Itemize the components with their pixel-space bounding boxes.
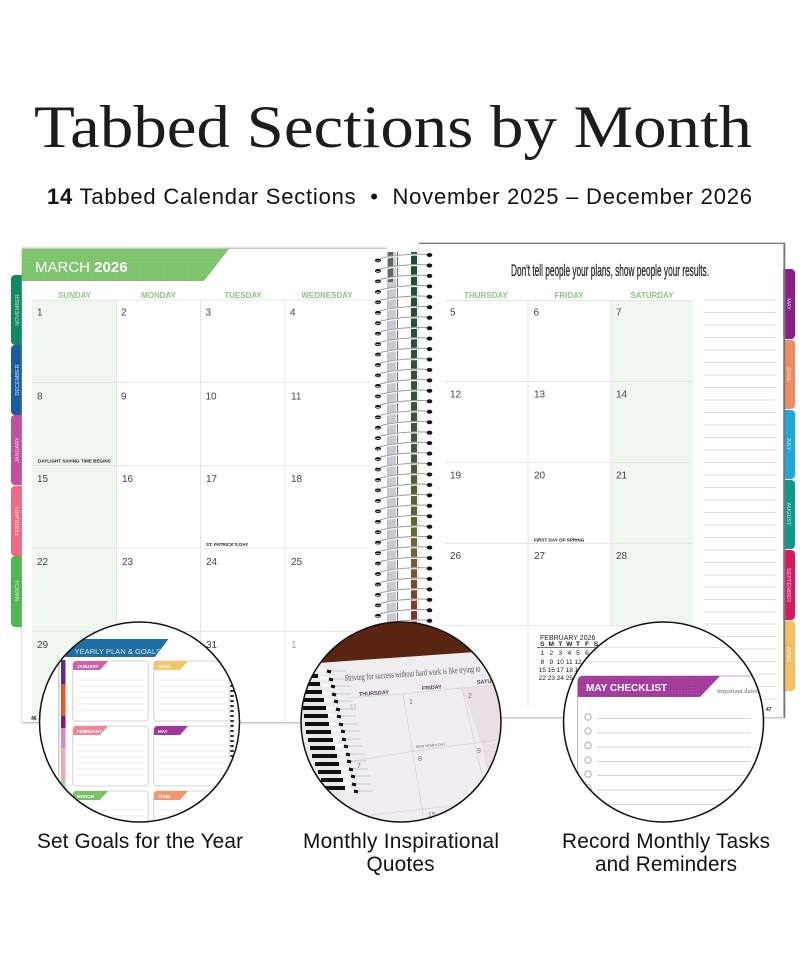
yearly plan banner bbox=[65, 639, 168, 657]
april box: APRIL bbox=[158, 664, 172, 669]
weekday headings bbox=[58, 291, 353, 300]
date numbers: 47 bbox=[766, 707, 772, 713]
date numbers: 19 bbox=[450, 470, 462, 482]
weekday labels in photo: THURSDAY bbox=[359, 690, 389, 698]
mini calendar: 10 bbox=[557, 659, 564, 666]
mini calendar: 20 bbox=[583, 667, 591, 674]
mini calendar: 19 bbox=[574, 667, 582, 674]
caption: set goals: Set Goals for the Year bbox=[37, 830, 243, 853]
left calendar page bbox=[22, 248, 387, 723]
weekday headings bbox=[464, 291, 674, 300]
date numbers: 1 bbox=[37, 308, 43, 318]
mini calendar: M bbox=[549, 641, 555, 648]
date numbers: 18 bbox=[291, 474, 303, 485]
weekday labels in photo: SATURDAY bbox=[477, 678, 507, 686]
date numbers: 7 bbox=[616, 308, 622, 318]
may box bbox=[154, 726, 229, 786]
april box bbox=[154, 661, 229, 721]
tab strip bbox=[61, 660, 66, 792]
date numbers bbox=[31, 308, 303, 722]
february box bbox=[73, 726, 148, 786]
dates in photo: 9 bbox=[477, 748, 481, 755]
mini calendar: 5 bbox=[576, 650, 580, 657]
dates in photo: 1 bbox=[409, 699, 413, 706]
caption: tasks and reminders bbox=[562, 830, 770, 876]
june box bbox=[153, 790, 211, 820]
callout circle: may checklist bbox=[564, 622, 774, 830]
quote text in photo: Striving for success without hard work is like trying to bbox=[344, 664, 481, 683]
event notes: ST. PATRICK'S DAY bbox=[206, 542, 248, 547]
checklist banner bbox=[578, 676, 720, 697]
saturday column shading bbox=[611, 300, 693, 625]
spiral coils bbox=[375, 253, 432, 628]
march box bbox=[72, 790, 149, 821]
spiral coils in photo bbox=[318, 670, 373, 792]
mini calendar: 4 bbox=[567, 650, 571, 657]
date numbers: 26 bbox=[450, 551, 462, 562]
weekday headings: SUNDAY bbox=[58, 291, 92, 300]
caption: tasks and reminders: Record Monthly Tasks bbox=[562, 830, 770, 853]
date numbers: 25 bbox=[291, 557, 303, 568]
weekday headings: MONDAY bbox=[141, 291, 177, 300]
event note: FIRST DAY OF SPRING bbox=[534, 538, 585, 542]
date numbers: 22 bbox=[37, 557, 49, 568]
date numbers: 5 bbox=[450, 308, 456, 318]
date numbers: 6 bbox=[534, 308, 540, 318]
checklist rows bbox=[585, 714, 751, 804]
callout circle: monthly quote photo bbox=[298, 622, 507, 830]
event notes bbox=[38, 458, 248, 547]
yearly plan banner: YEARLY PLAN & GOALS bbox=[74, 647, 161, 656]
right month tabs: APRIL bbox=[785, 647, 791, 663]
mini calendar: 23 bbox=[548, 675, 555, 682]
date numbers: 12 bbox=[450, 390, 462, 400]
holiday note in photo: NEW YEAR'S DAY bbox=[416, 742, 446, 749]
mini calendar: FEBRUARY 2026 bbox=[540, 635, 595, 642]
sunday column shading bbox=[32, 300, 116, 721]
dates in photo bbox=[349, 693, 481, 819]
checklist banner: MAY CHECKLIST bbox=[586, 683, 667, 694]
month header banner bbox=[22, 249, 229, 281]
event notes: DAYLIGHT SAVING TIME BEGINS bbox=[38, 458, 111, 464]
mini calendar: 18 bbox=[566, 667, 573, 674]
date numbers: 13 bbox=[534, 390, 546, 400]
dates in photo: 2 bbox=[468, 693, 472, 700]
right month tabs: JUNE bbox=[785, 367, 791, 382]
mini calendar bbox=[537, 635, 600, 682]
caption: monthly quotes bbox=[303, 830, 499, 876]
mini calendar: T bbox=[558, 641, 562, 648]
subtitle: 14 Tabbed Calendar Sections • November 2025 – December 2026 bbox=[47, 184, 752, 209]
mini calendar: 13 bbox=[583, 659, 591, 666]
mini calendar: T bbox=[576, 641, 580, 648]
january box: JANUARY bbox=[77, 664, 99, 669]
date numbers: 2 bbox=[121, 308, 127, 318]
mini calendar: 1 bbox=[540, 650, 544, 657]
date numbers: 23 bbox=[122, 557, 134, 568]
caption: monthly quotes: Monthly Inspirational bbox=[303, 830, 499, 853]
march box: MARCH bbox=[77, 794, 94, 799]
caption: tasks and reminders: and Reminders bbox=[595, 853, 737, 876]
mini calendar: S bbox=[594, 641, 599, 648]
may box: MAY bbox=[158, 729, 168, 734]
mini calendar: 25 bbox=[566, 675, 573, 682]
mini calendar: F bbox=[585, 641, 589, 648]
date numbers: 20 bbox=[534, 470, 546, 482]
date numbers: 8 bbox=[37, 392, 43, 402]
january box bbox=[73, 661, 148, 721]
mini calendar: 28 bbox=[592, 675, 600, 682]
month header banner: MARCH 2026 bbox=[35, 259, 128, 276]
mini calendar: 2 bbox=[549, 650, 553, 657]
mini calendar: W bbox=[566, 641, 573, 648]
mini calendar: 12 bbox=[574, 659, 582, 666]
spiral spine bbox=[387, 250, 420, 625]
right month tabs: MAY bbox=[785, 298, 791, 310]
weekday headings: SATURDAY bbox=[630, 291, 674, 300]
date numbers: 17 bbox=[206, 474, 218, 485]
caption: monthly quotes: Quotes bbox=[366, 853, 434, 876]
date numbers: 3 bbox=[206, 308, 212, 318]
right month tabs: AUGUST bbox=[785, 503, 791, 526]
date numbers: 11 bbox=[291, 392, 302, 402]
february box: FEBRUARY bbox=[77, 729, 102, 734]
date numbers bbox=[450, 308, 772, 713]
date numbers: 27 bbox=[534, 551, 546, 562]
left month tabs bbox=[11, 275, 27, 627]
right month tabs bbox=[776, 269, 795, 691]
mini calendar: 26 bbox=[574, 675, 582, 682]
weekday headings: WEDNESDAY bbox=[301, 291, 353, 300]
left month tabs: MARCH bbox=[15, 581, 21, 601]
weekday headings: THURSDAY bbox=[464, 291, 509, 300]
dates in photo: 31 bbox=[349, 704, 357, 711]
date numbers: 1 bbox=[291, 640, 297, 651]
date numbers: 4 bbox=[290, 308, 296, 318]
left month tabs: JANUARY bbox=[15, 437, 21, 463]
mini calendar: 3 bbox=[558, 650, 562, 657]
notes lines bbox=[704, 300, 776, 699]
mini calendar: 24 bbox=[557, 675, 564, 682]
mini calendar: 6 bbox=[585, 650, 589, 657]
callout circle: yearly plan and goals bbox=[38, 621, 240, 823]
date numbers: 46 bbox=[31, 716, 37, 722]
date numbers: 28 bbox=[616, 551, 628, 562]
left month tabs: DECEMBER bbox=[15, 364, 21, 396]
date numbers: 31 bbox=[206, 640, 218, 651]
binder stack in photo bbox=[298, 668, 345, 812]
mini calendar: 17 bbox=[557, 667, 564, 674]
weekday headings: FRIDAY bbox=[554, 291, 584, 300]
left month tabs: FEBRUARY bbox=[15, 506, 21, 536]
dates in photo: 15 bbox=[428, 812, 436, 819]
checklist note: Important dates, tasks bbox=[717, 688, 774, 695]
mini calendar: 21 bbox=[592, 667, 600, 674]
mini calendar: 15 bbox=[539, 667, 546, 674]
title: Tabbed Sections by Month bbox=[34, 94, 752, 160]
date numbers: 24 bbox=[206, 557, 218, 568]
date numbers: 9 bbox=[121, 392, 127, 402]
right month tabs: JULY bbox=[785, 437, 791, 451]
mini calendar: 16 bbox=[548, 667, 555, 674]
right month tabs: SEPTEMBER bbox=[785, 568, 791, 602]
weekday headings: TUESDAY bbox=[224, 291, 262, 300]
date numbers: 21 bbox=[616, 470, 628, 482]
mini calendar: 7 bbox=[594, 650, 598, 657]
mini calendar: S bbox=[540, 641, 545, 648]
date numbers: 10 bbox=[206, 392, 217, 402]
mini calendar: 8 bbox=[540, 659, 544, 666]
right calendar page bbox=[419, 244, 784, 718]
weekday labels in photo: FRIDAY bbox=[422, 685, 442, 692]
date numbers: 15 bbox=[37, 474, 49, 485]
mini calendar: 14 bbox=[592, 659, 600, 666]
mini calendar: 22 bbox=[539, 675, 546, 682]
date numbers: 29 bbox=[37, 640, 49, 651]
mini calendar: 27 bbox=[583, 675, 591, 682]
june box: JUNE bbox=[158, 794, 170, 799]
weekday labels in photo bbox=[358, 679, 492, 696]
date numbers: 14 bbox=[616, 390, 628, 400]
left month tabs: NOVEMBER bbox=[15, 294, 21, 326]
date numbers: 16 bbox=[122, 474, 134, 485]
mini calendar: 11 bbox=[566, 659, 573, 666]
dates in photo: 8 bbox=[418, 756, 422, 763]
mini calendar: 9 bbox=[549, 659, 553, 666]
dates in photo: 7 bbox=[357, 763, 361, 770]
